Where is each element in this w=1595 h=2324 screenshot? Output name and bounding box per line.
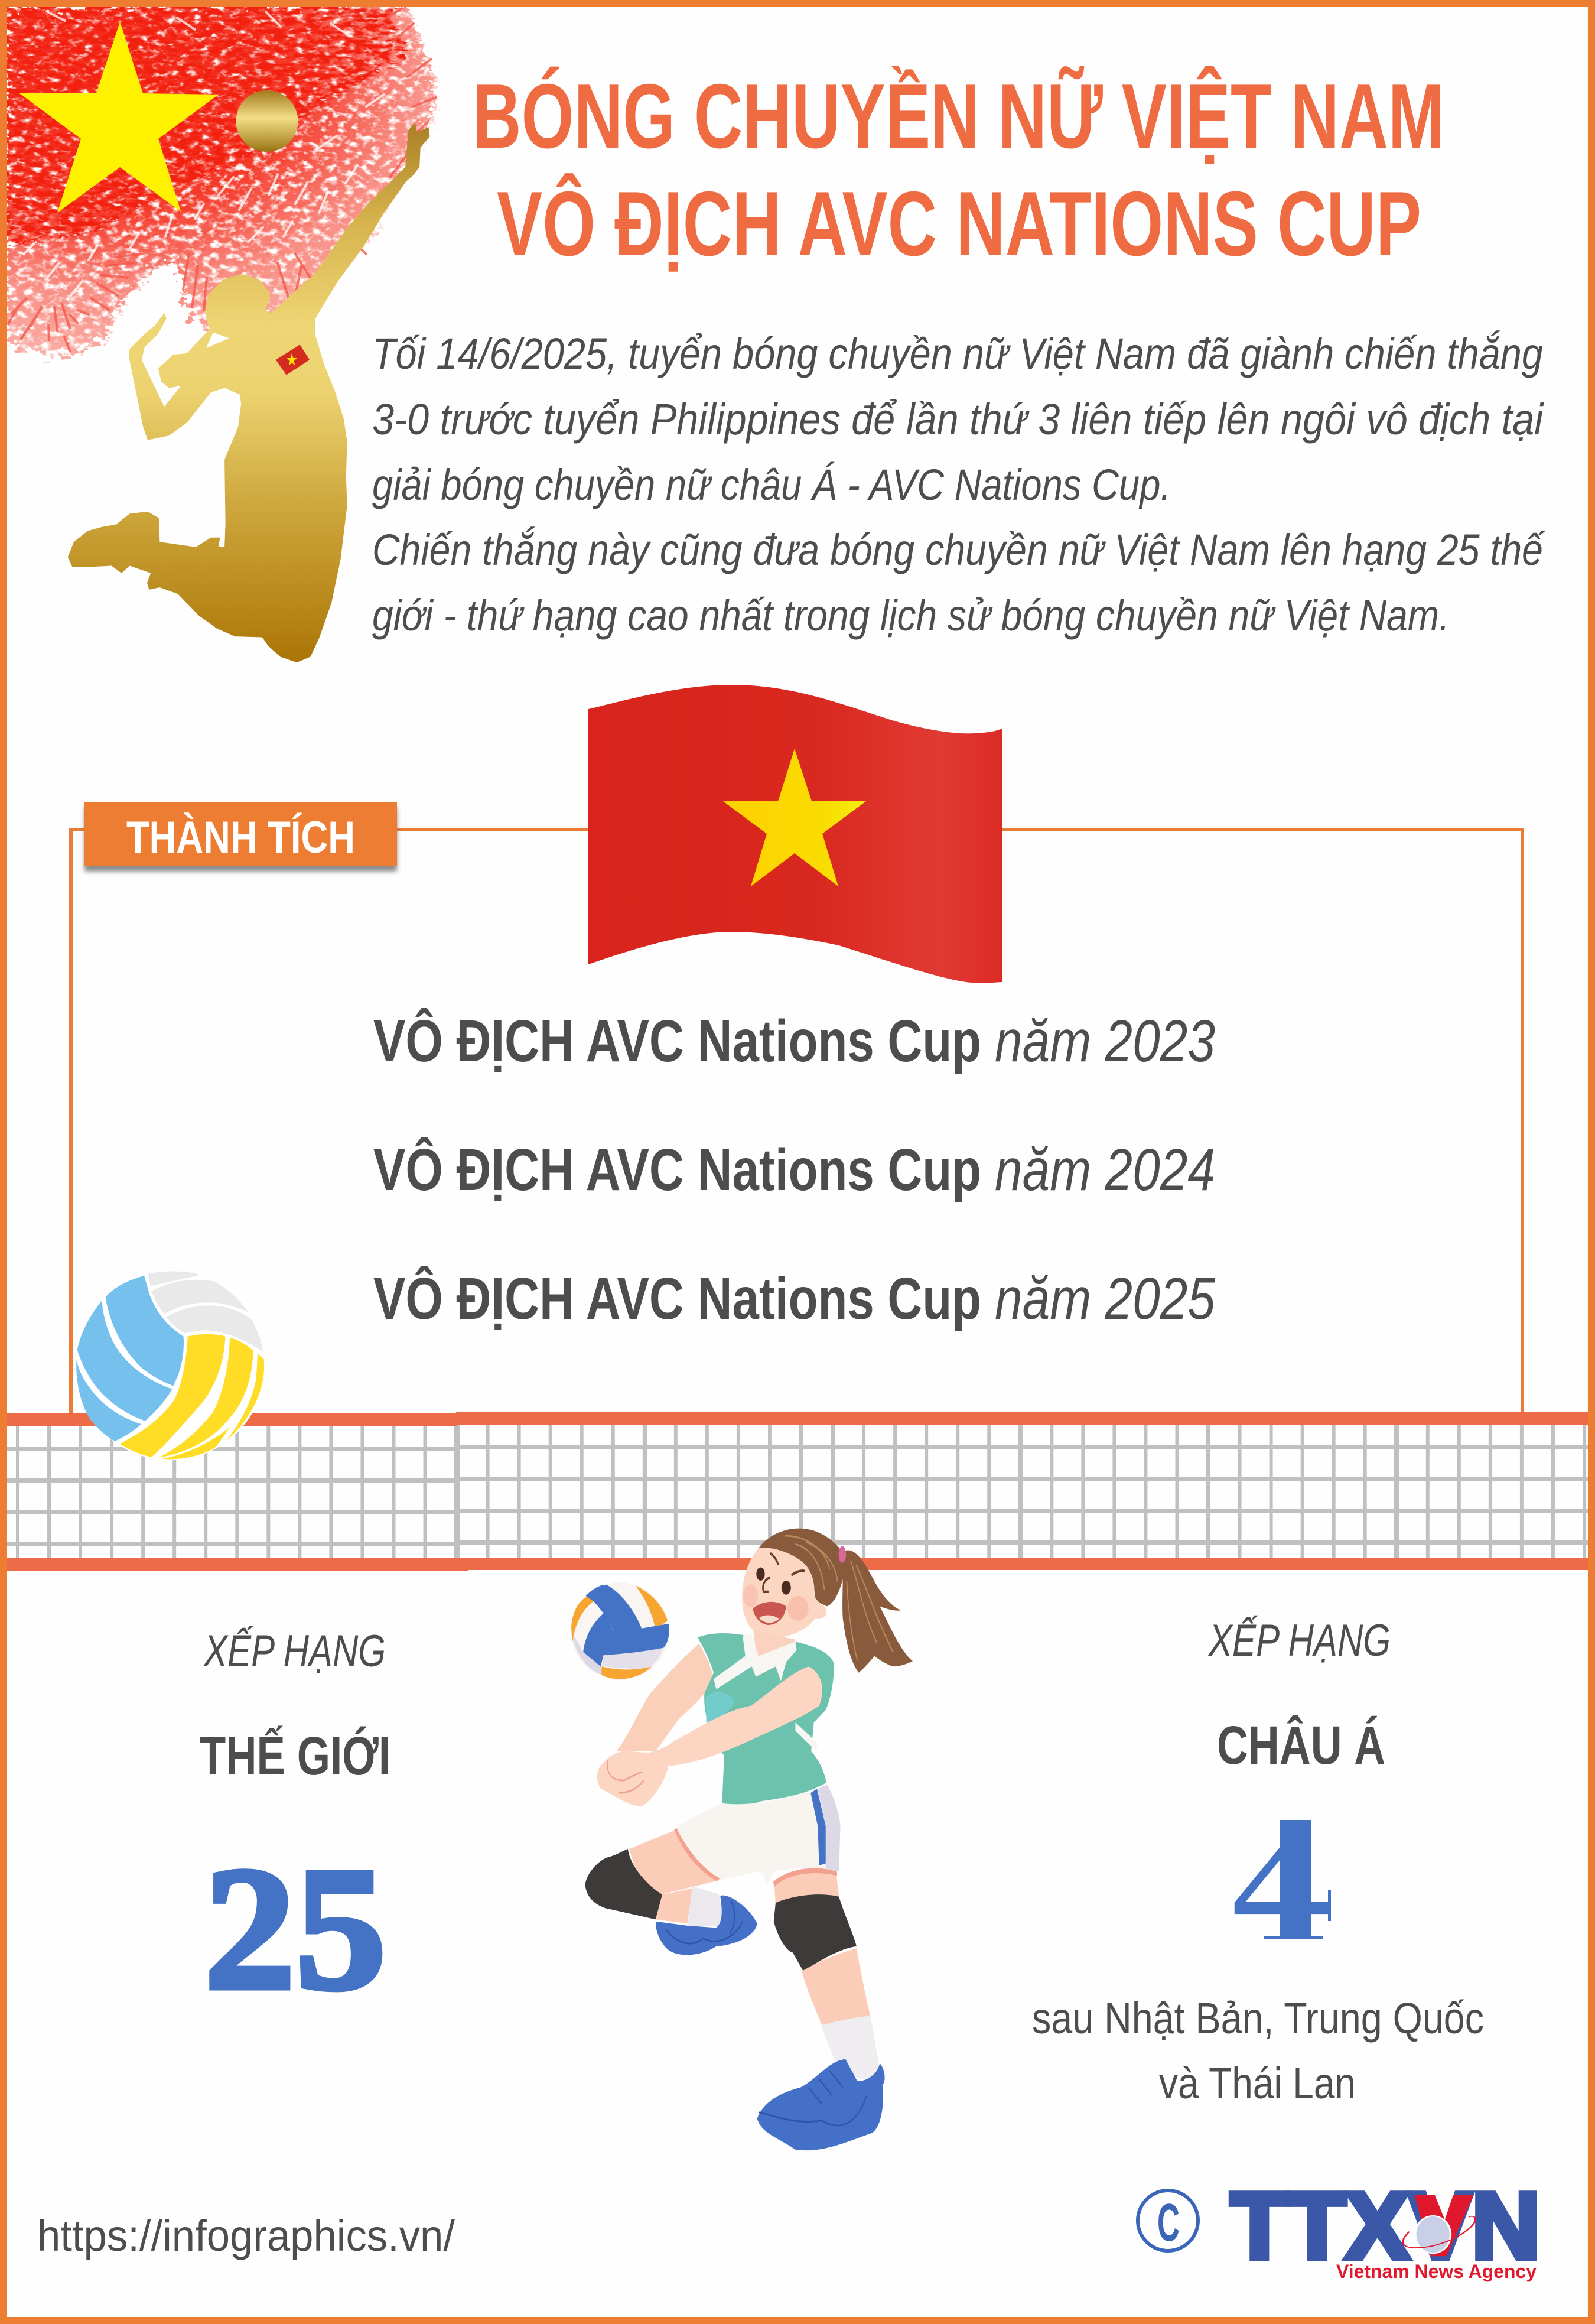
text: asia ranking note: và Thái Lan (1159, 2059, 1356, 2108)
achievement 2024: VÔ ĐỊCH AVC Nations Cup (373, 1137, 981, 1203)
illustration: player receiving the ball (571, 1529, 913, 2150)
icon: flag on jersey (276, 344, 310, 375)
title (473, 65, 1444, 275)
icon: gold player silhouette (68, 123, 430, 662)
back arm (616, 1644, 714, 1751)
panel: achievements frame (71, 830, 1522, 1415)
front arm and hands (597, 1666, 822, 1806)
text: world heading: THẾ GIỚI (200, 1725, 390, 1786)
shorts (676, 1785, 841, 1886)
volleyball net (7, 1412, 1588, 1571)
icon: copyright mark: C (1157, 2193, 1180, 2253)
text: website url: https://infographics.vn/ (37, 2211, 455, 2260)
achievement 2025: năm 2025 (995, 1266, 1215, 1332)
text: asia ranking note (1032, 1994, 1484, 2108)
logo: TTXVN Vietnam News Agency: Vietnam News Agency (1336, 2261, 1537, 2282)
number: world rank 25: 25 (204, 1831, 386, 2026)
right leg (757, 1868, 885, 2150)
intro paragraph (372, 329, 1545, 640)
icon: small volleyball (571, 1582, 669, 1680)
label: THÀNH TÍCH (84, 802, 397, 866)
icon: yellow star on splash (19, 22, 219, 213)
number: asia rank 4: 4 (1231, 1783, 1332, 1978)
text: asia ranking label: XẾP HẠNG (1207, 1615, 1391, 1666)
head (742, 1529, 846, 1638)
ponytail (842, 1550, 913, 1673)
logo: TTXVN Vietnam News Agency: TTXVN (1231, 2174, 1540, 2278)
text: asia heading: CHÂU Á (1217, 1715, 1385, 1776)
icon: waving flag (588, 685, 1002, 983)
achievement 2023: năm 2023 (995, 1008, 1215, 1074)
text: world ranking label: XẾP HẠNG (203, 1626, 386, 1676)
jersey (698, 1631, 834, 1806)
intro paragraph: giới - thứ hạng cao nhất trong lịch sử bóng chuyền nữ Việt Nam. (372, 591, 1450, 640)
label: THÀNH TÍCH: THÀNH TÍCH (126, 812, 355, 863)
intro paragraph: giải bóng chuyền nữ châu Á - AVC Nations Cup. (372, 460, 1171, 509)
achievement 2025: VÔ ĐỊCH AVC Nations Cup (373, 1266, 981, 1332)
text: asia ranking note: sau Nhật Bản, Trung Quốc (1032, 1994, 1484, 2043)
paint splash: Vietnamese flag background (7, 7, 436, 355)
icon: blue and yellow volleyball (76, 1270, 265, 1460)
left leg (585, 1828, 757, 1955)
icon: copyright mark (1138, 2190, 1198, 2253)
achievement 2024: năm 2024 (995, 1137, 1215, 1203)
achievement 2023: VÔ ĐỊCH AVC Nations Cup (373, 1008, 981, 1074)
icon: gold volleyball (236, 90, 298, 152)
